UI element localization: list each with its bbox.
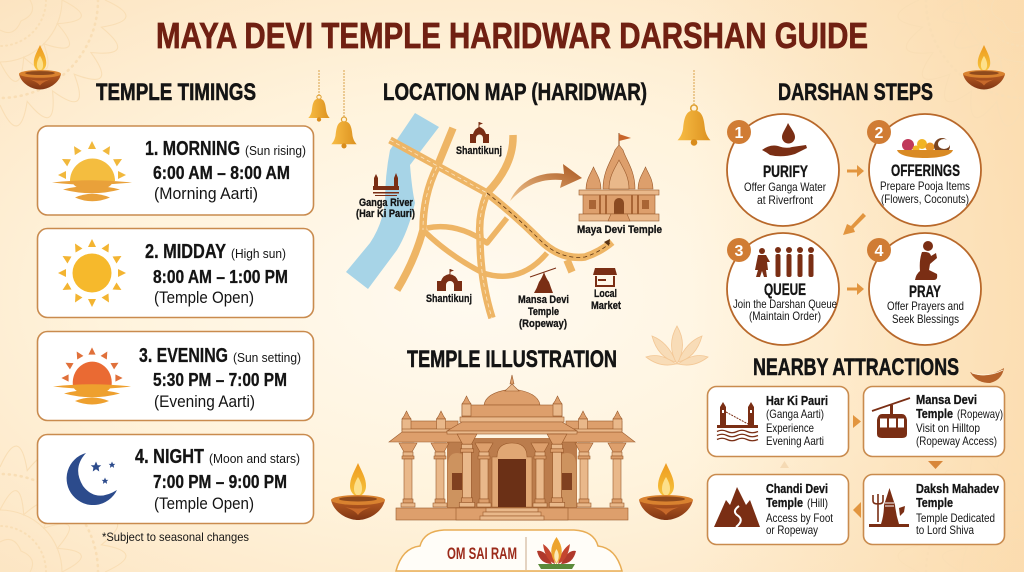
badge: 1: 1 — [735, 125, 744, 142]
card: Mansa Devi Temple: (Ropeway Access) — [916, 434, 997, 448]
label: Mansa Devi Temple: Mansa Devi — [518, 294, 569, 306]
arrow: step 1 to 2 — [847, 165, 864, 177]
label: Mansa Devi Temple — [518, 294, 569, 330]
step 4: pray — [867, 233, 981, 345]
card: Har Ki Pauri: Har Ki Pauri — [766, 393, 828, 408]
card: morning: (Morning Aarti) — [154, 184, 258, 203]
badge: 3: 3 — [735, 243, 744, 260]
icon: lotus logo — [537, 537, 576, 569]
card: Har Ki Pauri: (Ganga Aarti) — [766, 407, 824, 421]
card: Daksh Mahadev Temple: Temple — [916, 495, 953, 510]
label: Shantikunj bottom: Shantikunj — [426, 293, 472, 305]
label: Local Market — [591, 288, 621, 312]
card: Chandi Devi Temple: (Hill) — [807, 496, 828, 510]
card: evening: 5:30 PM – 7:00 PM — [153, 370, 287, 390]
step 1: purify: PURIFY — [763, 162, 808, 181]
card: evening: (Evening Aarti) — [154, 392, 255, 411]
card: Chandi Devi Temple — [708, 474, 848, 544]
footer text: OM SAI RAM — [447, 544, 517, 563]
arrow: faint up — [780, 461, 789, 468]
icon: praying figure — [915, 241, 937, 280]
card: Chandi Devi Temple: or Ropeway — [766, 523, 818, 537]
icon: top-left diya — [19, 45, 61, 89]
step 4: pray: Offer Prayers and — [887, 299, 964, 313]
panel: nearby attractions — [708, 354, 1004, 544]
arrow: to Mansa Devi — [853, 415, 861, 428]
icon: local market — [593, 268, 617, 287]
card: Daksh Mahadev Temple: Daksh Mahadev — [916, 481, 1000, 496]
card: Mansa Devi Temple: Temple — [916, 406, 953, 421]
card: Daksh Mahadev Temple: Temple Dedicated — [916, 511, 995, 525]
icon: offerings plate — [897, 138, 953, 158]
card: Daksh Mahadev Temple: to Lord Shiva — [916, 523, 974, 537]
label: Mansa Devi Temple: Temple — [528, 306, 559, 318]
icon: Shantikunj bottom — [437, 269, 462, 291]
panel: temple illustration — [331, 346, 693, 520]
badge: 4: 4 — [875, 243, 884, 260]
label: Local Market: Local — [594, 288, 617, 300]
card: evening: (Sun setting) — [233, 350, 301, 365]
card: midday: (Temple Open) — [154, 288, 254, 307]
card: Har Ki Pauri: Evening Aarti — [766, 434, 824, 448]
label: Ganga River: Ganga River — [359, 197, 414, 209]
step 2: offerings — [867, 114, 981, 226]
heading: location map: LOCATION MAP (HARIDWAR) — [383, 79, 647, 106]
label: Ganga River — [356, 197, 415, 220]
card: midday: 2. MIDDAY — [145, 241, 227, 263]
heading: temple illustration: TEMPLE ILLUSTRATION — [407, 346, 617, 373]
card: night: 7:00 PM – 9:00 PM — [153, 472, 287, 492]
step 1: purify — [727, 114, 839, 226]
card: night — [38, 434, 314, 524]
card: evening — [38, 332, 314, 420]
icon: Shantikunj top — [470, 122, 489, 143]
step 4: pray: PRAY — [909, 282, 941, 301]
footnote: *Subject to seasonal changes — [102, 530, 249, 544]
card: morning: 6:00 AM – 8:00 AM — [153, 163, 290, 183]
card: Chandi Devi Temple: Access by Foot — [766, 511, 834, 525]
heading: darshan steps: DARSHAN STEPS — [778, 79, 933, 106]
icon: setting sun — [53, 347, 131, 404]
icon: Mansa Devi ropeway small — [530, 268, 556, 293]
card: morning: (Sun rising) — [245, 143, 306, 158]
step 2: offerings: OFFERINGS — [891, 161, 960, 180]
card: Mansa Devi Temple — [864, 386, 1004, 456]
map: road arrowhead — [604, 239, 610, 246]
icon: diya right — [639, 463, 693, 520]
badge: 2: 2 — [875, 125, 884, 142]
label: Ganga River: (Har Ki Pauri) — [356, 208, 415, 220]
step 3: queue: (Maintain Order) — [749, 309, 821, 323]
card: Chandi Devi Temple: Chandi Devi — [766, 481, 828, 496]
step 2: offerings: Prepare Pooja Items — [880, 179, 970, 193]
icon: ropeway cabin — [872, 398, 910, 438]
label: Local Market: Market — [591, 300, 621, 312]
icon: ghat towers — [717, 402, 758, 441]
card: Mansa Devi Temple: Visit on Hilltop — [916, 421, 980, 435]
illustration: temple — [389, 375, 635, 520]
card: midday: (High sun) — [231, 246, 286, 261]
arrow: to Chandi Devi — [853, 502, 861, 518]
icon: high sun — [58, 239, 126, 307]
icon: moon and stars — [67, 453, 117, 505]
heading: temple timings: TEMPLE TIMINGS — [96, 79, 256, 106]
step 3: queue: QUEUE — [764, 280, 806, 299]
card: Mansa Devi Temple: (Ropeway) — [957, 407, 1003, 421]
icon: diya left — [331, 463, 385, 520]
step 1: purify: at Riverfront — [757, 193, 814, 207]
icon: rising sun — [52, 141, 132, 201]
icon: Maya Devi temple small — [579, 133, 659, 221]
card: Har Ki Pauri — [708, 386, 848, 456]
card: morning — [38, 126, 314, 215]
arrow: to Maya Devi temple — [510, 164, 582, 201]
step 4: pray: Seek Blessings — [892, 312, 959, 326]
icon: Har Ki Pauri small — [373, 173, 399, 196]
map: ganga river — [346, 113, 439, 289]
icon: hills with path — [714, 487, 760, 527]
icon: queue of people — [755, 247, 814, 277]
card: night: 4. NIGHT — [135, 446, 204, 468]
label: Maya Devi Temple: Maya Devi Temple — [577, 224, 662, 236]
arrow: step 3 to 4 — [847, 283, 864, 295]
icon: faint lotus — [646, 326, 708, 365]
card: morning: 1. MORNING — [145, 138, 240, 160]
panel: temple timings — [38, 79, 314, 544]
arrow: to Daksh Mahadev — [928, 461, 943, 469]
card: Har Ki Pauri: Experience — [766, 421, 814, 435]
arrow: step 2 to 3 — [843, 213, 866, 235]
card: midday — [38, 228, 314, 318]
card: Daksh Mahadev Temple — [864, 474, 1004, 544]
panel: darshan steps — [727, 79, 981, 345]
card: night: (Temple Open) — [154, 494, 254, 513]
icon: top-right diya — [963, 45, 1005, 89]
icon: shiva lingam and trident — [869, 488, 909, 527]
icon: hanging bells left — [308, 70, 357, 148]
card: evening: 3. EVENING — [139, 345, 228, 367]
icon: small diya leaf — [970, 368, 1004, 383]
card: night: (Moon and stars) — [209, 451, 300, 466]
step 3: queue: Join the Darshan Queue — [733, 297, 837, 311]
card: Chandi Devi Temple: Temple — [766, 495, 803, 510]
card: Mansa Devi Temple: Mansa Devi — [916, 392, 977, 407]
label: Mansa Devi Temple: (Ropeway) — [519, 318, 567, 330]
step 2: offerings: (Flowers, Coconuts) — [881, 192, 969, 206]
title: MAYA DEVI TEMPLE HARIDWAR DARSHAN GUIDE — [156, 15, 868, 56]
icon: water drop on hand — [762, 123, 807, 156]
icon: hanging bell right — [678, 70, 710, 146]
heading: nearby attractions: NEARBY ATTRACTIONS — [753, 354, 959, 381]
step 1: purify: Offer Ganga Water — [744, 180, 826, 194]
footer badge — [396, 530, 622, 571]
card: midday: 8:00 AM – 1:00 PM — [153, 267, 288, 287]
step 3: queue — [727, 233, 839, 345]
label: Shantikunj top: Shantikunj — [456, 145, 502, 157]
panel: location map — [346, 79, 662, 330]
map: roads — [390, 128, 612, 318]
